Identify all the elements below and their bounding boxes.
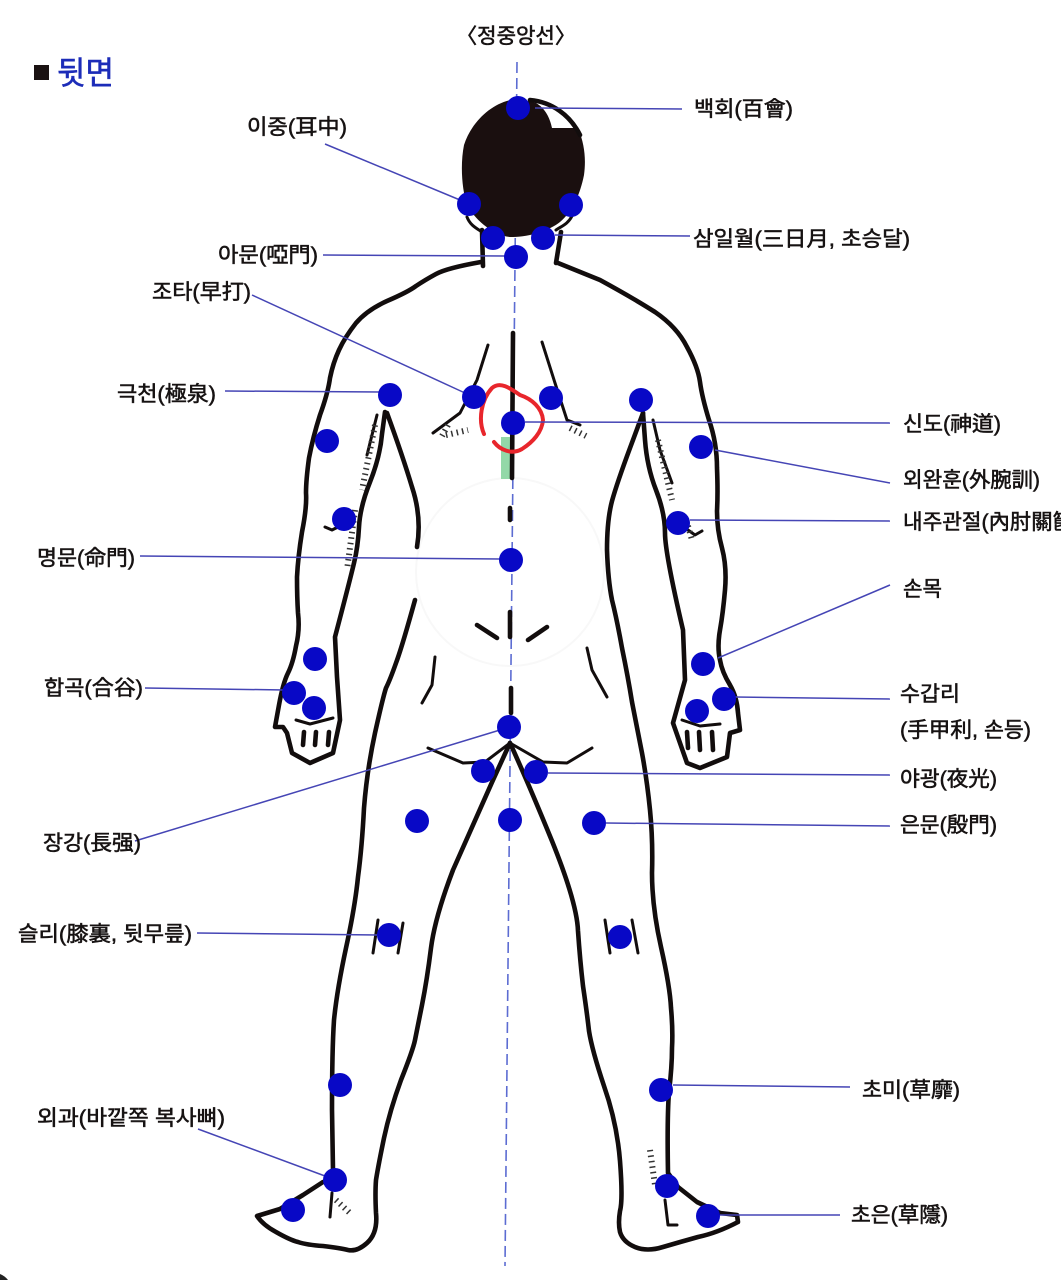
left shoulder and outer arm [275, 262, 481, 763]
callout: Oegwa: 외과(바깥쪽 복사뼈) [37, 1107, 225, 1130]
callout: Sonmok: 손목 [903, 578, 942, 601]
fingers [303, 732, 713, 750]
callout: Samilwol: 삼일월(三日月, 초승달) [693, 228, 910, 251]
right shoulder and outer arm [558, 263, 740, 768]
stipple shading [336, 425, 692, 1215]
callout: Sugapri: (手甲利, 손등) [900, 719, 1031, 742]
corner scan mark [0, 1274, 8, 1280]
callout: Jota [152, 281, 465, 393]
hips [422, 648, 607, 703]
callout: Ijung: 이중(耳中) [247, 116, 347, 139]
callout: Myeongmun [37, 547, 500, 570]
callout: Oewanhun: 외완훈(外腕訓) [903, 469, 1040, 492]
hand creases [296, 718, 720, 726]
heading: back side: 뒷면 [57, 55, 114, 91]
callout: Ijung [247, 116, 460, 200]
midline dashed axis [505, 62, 517, 1266]
callout: Hapgok: 합곡(合谷) [44, 677, 143, 700]
midline label: 〈정중앙선〉 [456, 25, 576, 48]
callout: Oegwa [37, 1107, 325, 1176]
callout: Oewanhun [715, 450, 1040, 492]
callout: Jota: 조타(早打) [152, 281, 251, 304]
callout: Amun: 아문(啞門) [218, 244, 318, 267]
callout: Sonmok [718, 578, 942, 658]
glutes [428, 743, 592, 763]
acupoint dots [281, 96, 736, 1228]
callout: Sugapri [735, 683, 1031, 742]
lower back creases [477, 625, 547, 640]
ankle marks [330, 1193, 677, 1225]
callout: Sindo: 신도(神道) [903, 413, 1001, 436]
spine [510, 333, 513, 713]
left inner leg and foot [257, 743, 510, 1250]
callout: Janggang [43, 730, 500, 855]
human body back view figure [257, 99, 740, 1250]
faint circle on lower back [416, 478, 604, 666]
callout: Choeun: 초은(草隱) [851, 1204, 948, 1227]
callout: Eunmun [606, 814, 997, 837]
green highlight on spine [501, 437, 513, 479]
heading: back side [34, 55, 114, 91]
callout: Baekhoe: 백회(百會) [694, 98, 793, 121]
callout: Sugapri: 수갑리 [900, 683, 960, 706]
callout: Yagwang: 야광(夜光) [900, 768, 997, 791]
red hand-drawn circle around Sindo point [481, 385, 543, 452]
head outline top right [530, 100, 580, 135]
callout: Myeongmun: 명문(命門) [37, 547, 135, 570]
callout: Geukcheon: 극천(極泉) [117, 383, 216, 406]
shoulder blades [433, 342, 580, 433]
elbow creases [325, 415, 702, 535]
callout: Janggang: 장강(長强) [43, 832, 141, 855]
head hair [462, 99, 585, 237]
callout: Eunmun: 은문(殷門) [900, 814, 997, 837]
ears [467, 216, 572, 232]
neck [482, 230, 561, 266]
knee creases [373, 920, 638, 953]
right torso and leg [510, 413, 738, 1250]
callout: Seulli: 슬리(膝裏, 뒷무릎) [18, 923, 192, 946]
torso and left leg [387, 413, 419, 547]
callout: Chomi: 초미(草靡) [862, 1079, 960, 1102]
